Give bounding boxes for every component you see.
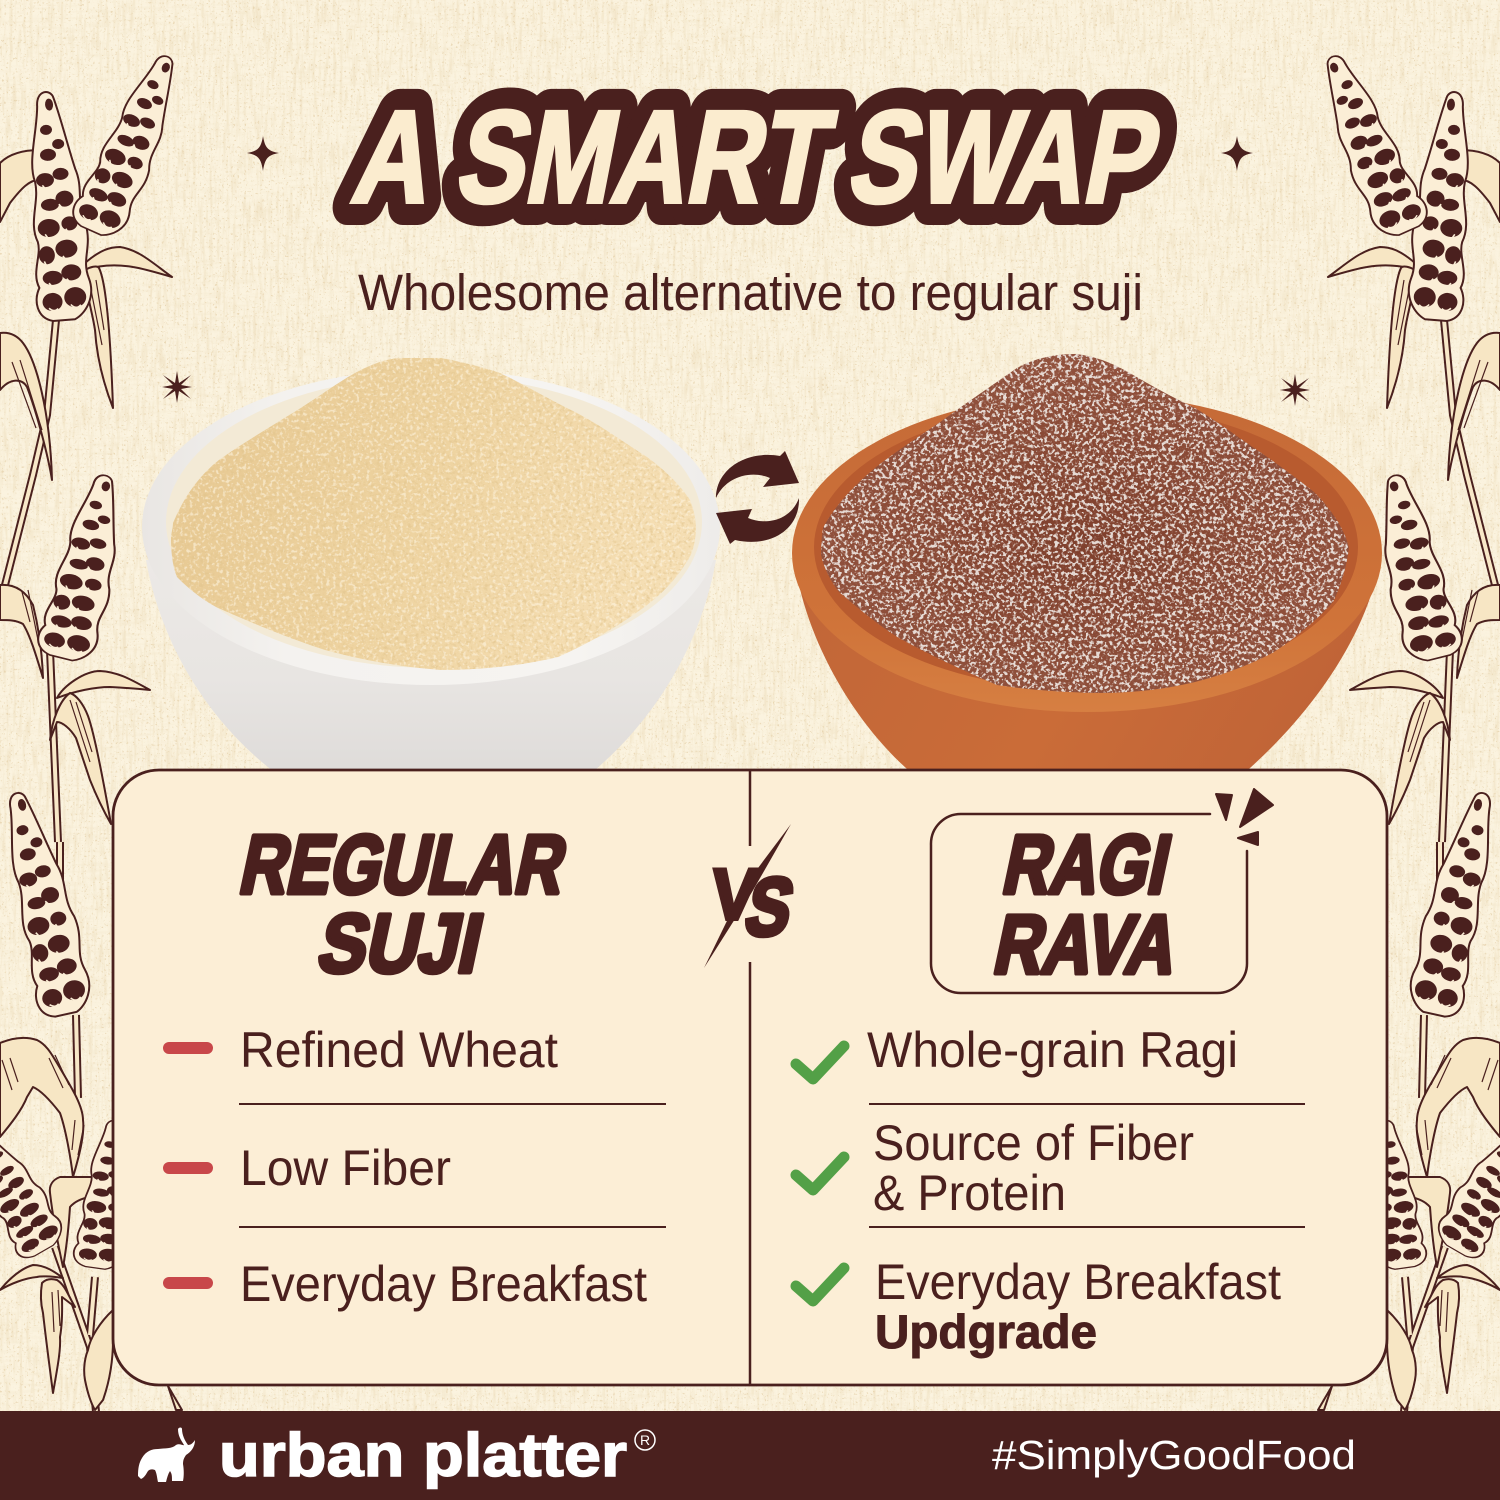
rule 1 [869, 1103, 1305, 1105]
icon: check 3 [796, 1268, 844, 1301]
card background [113, 770, 1387, 1385]
list: regular suji points [163, 1022, 666, 1312]
image: white bowl of regular suji [142, 358, 720, 775]
heading text [987, 818, 1187, 991]
brand name: urban platter [219, 1421, 627, 1489]
icon: elephant logo [138, 1428, 195, 1482]
heading: regular suji: SUJI [311, 897, 491, 990]
ragi pile [821, 354, 1349, 693]
ragi white grain [821, 354, 1349, 693]
center divider [749, 770, 751, 1385]
heading: regular suji [233, 818, 575, 990]
icon: sparkle right of bowl [1280, 374, 1310, 406]
icon: sparkle title right [1221, 136, 1253, 171]
icon: sparkle left of bowl [162, 371, 192, 403]
title: A SMART SWAP: A [343, 84, 448, 231]
title: A SMART SWAP: SMART [447, 84, 844, 231]
ragi dark grain [821, 354, 1349, 693]
suji light grain [171, 358, 696, 670]
panel: comparison card [113, 770, 1387, 1385]
item text 2 [873, 1115, 1194, 1221]
heading text: RAVA [987, 898, 1187, 991]
item text 3 [875, 1254, 1281, 1358]
rule 2 [869, 1226, 1305, 1228]
rule 2 [239, 1226, 666, 1228]
registered mark: R [640, 1432, 650, 1448]
bowl rim [142, 369, 720, 685]
heading text: RAGI [996, 818, 1179, 911]
icon: burst accent [1216, 789, 1273, 845]
item text 1: Whole-grain Ragi [867, 1022, 1238, 1078]
illustration: millet stalks right [1305, 47, 1500, 1412]
item text 1: Refined Wheat [240, 1022, 558, 1078]
suji pile [171, 358, 696, 670]
item text 2: Source of Fiber [873, 1115, 1194, 1171]
clay body [800, 590, 1370, 769]
icon: check 2 [796, 1157, 844, 1190]
icon: swap arrows [716, 451, 799, 544]
arrow top [716, 451, 799, 498]
icon: vs badge [704, 824, 802, 968]
title: A SMART SWAP: A [343, 84, 448, 231]
item text 2: & Protein [873, 1165, 1066, 1221]
bowl body [146, 560, 716, 775]
title: A SMART SWAP: SWAP [839, 84, 1172, 231]
item text 3: Everyday Breakfast [875, 1254, 1281, 1310]
illustration: millet stalks left [0, 47, 195, 1412]
list: ragi rava points [796, 1022, 1305, 1358]
item text 3: Everyday Breakfast [240, 1256, 647, 1312]
vs slash [704, 824, 791, 968]
title: A SMART SWAP: SMART [447, 84, 844, 231]
bowl inner wall [166, 376, 702, 668]
title: A SMART SWAP: SWAP [839, 84, 1172, 231]
item dash 1 [163, 1042, 213, 1054]
heading box: ragi rava [931, 789, 1273, 993]
suji dark grain [171, 358, 696, 670]
item text 3: Updgrade [875, 1305, 1097, 1358]
v letter: V [707, 855, 762, 935]
item dash 2 [163, 1162, 213, 1174]
registered mark [635, 1430, 655, 1450]
image: clay bowl of ragi rava [792, 354, 1382, 775]
box outline [931, 814, 1247, 993]
s letter: S [738, 861, 802, 953]
icon: sparkle title left [247, 136, 279, 171]
item dash 3 [163, 1277, 213, 1289]
arrow bottom [716, 498, 799, 544]
icon: check 1 [796, 1046, 844, 1079]
clay rim [792, 394, 1382, 712]
clay inner wall [814, 404, 1358, 690]
item text 2: Low Fiber [240, 1140, 451, 1196]
rule 1 [239, 1103, 666, 1105]
subtitle: Wholesome alternative to regular suji [358, 264, 1143, 321]
footer band [0, 1411, 1500, 1500]
hashtag: #SimplyGoodFood [992, 1432, 1356, 1478]
heading: regular suji: REGULAR [233, 818, 575, 911]
title: A SMART SWAP [343, 84, 1172, 231]
